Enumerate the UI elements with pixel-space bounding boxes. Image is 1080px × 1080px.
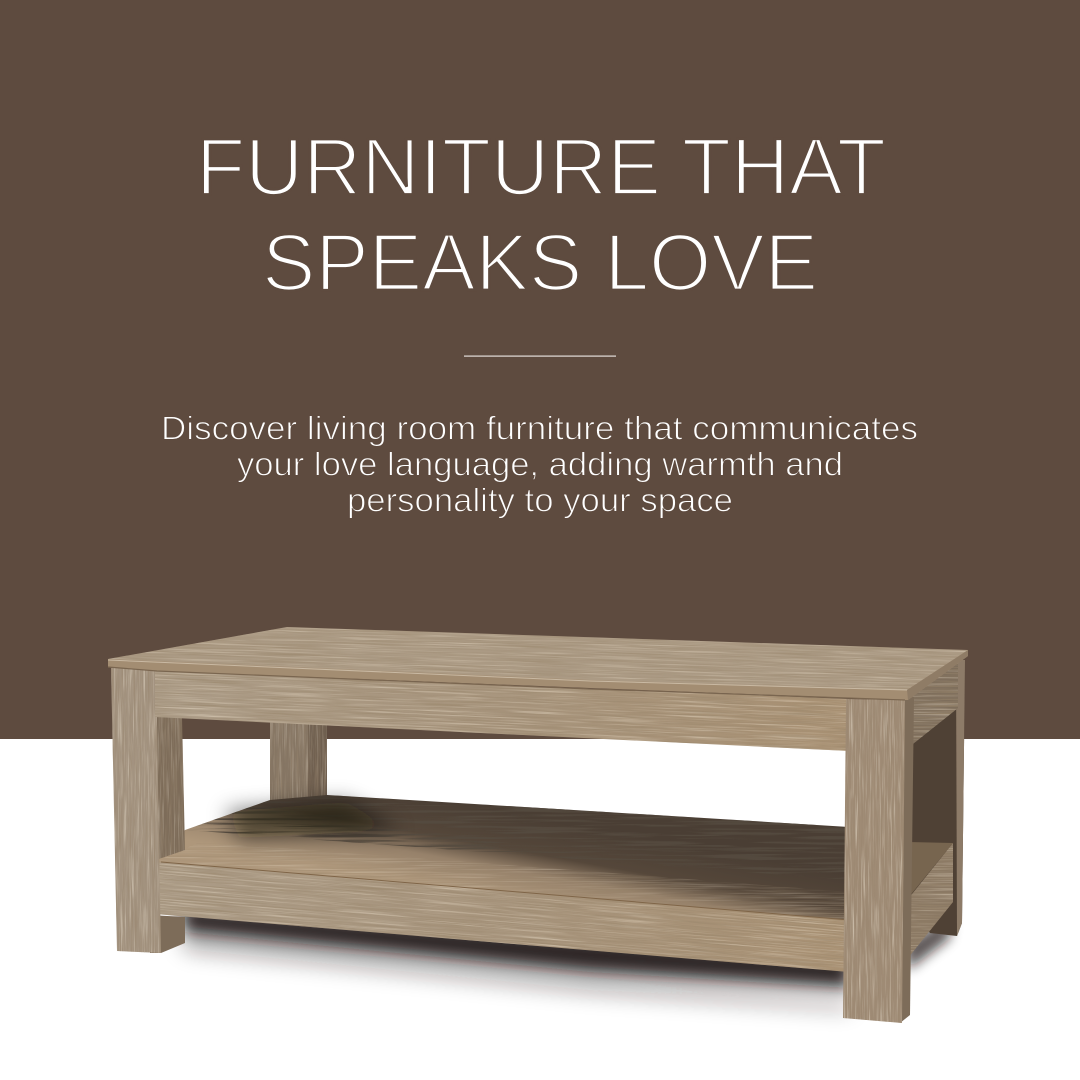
- subtitle text: [161, 410, 918, 518]
- upper apron: [155, 672, 848, 751]
- subtitle text: Discover living room furniture that communicates: [161, 410, 918, 446]
- right side apron: [908, 663, 958, 748]
- front right leg: [843, 697, 914, 1023]
- title: [196, 122, 886, 308]
- shelf side return: [908, 842, 953, 958]
- title: FURNITURE THAT: [196, 122, 886, 212]
- subtitle text: personality to your space: [347, 482, 733, 518]
- subtitle text: your love language, adding warmth and: [237, 446, 843, 482]
- back left leg: [270, 720, 327, 804]
- brown background band: [0, 0, 1080, 739]
- floor shadow: [180, 905, 950, 1010]
- front left leg: [111, 668, 185, 953]
- shelf front rail: [160, 862, 844, 972]
- coffee table illustration: [108, 627, 968, 1023]
- divider rule: [464, 356, 616, 357]
- back right leg and dark interior: [908, 660, 965, 936]
- lower shelf top: [155, 795, 849, 925]
- table top: [108, 627, 968, 701]
- title: SPEAKS LOVE: [262, 218, 818, 308]
